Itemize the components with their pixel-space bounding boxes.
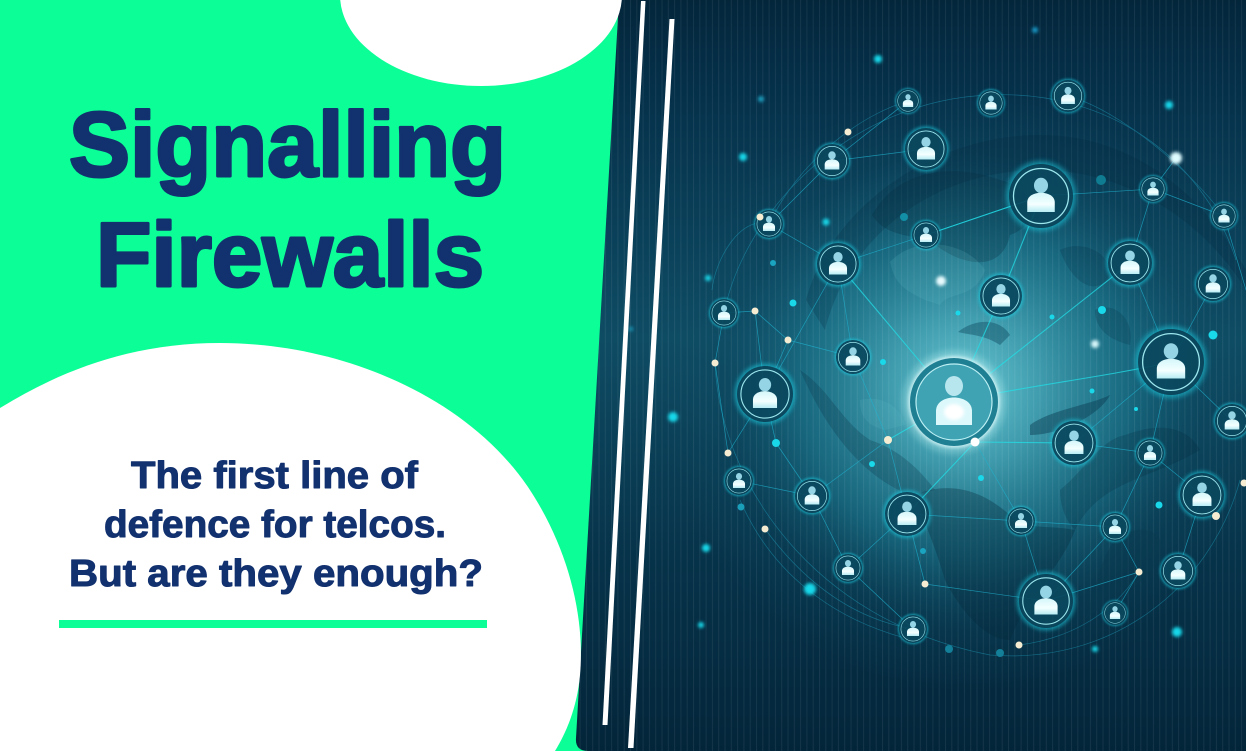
green underline	[59, 620, 487, 628]
subtitle: defence for telcos.	[104, 504, 446, 546]
title	[69, 94, 506, 306]
large white blob	[0, 343, 581, 751]
central user node	[908, 356, 1000, 448]
subtitle: The first line of	[131, 455, 418, 497]
vertical stripe texture	[576, 0, 1246, 751]
subtitle: But are they enough?	[69, 553, 483, 595]
bright connections	[838, 196, 1171, 514]
title: Firewalls	[96, 205, 484, 306]
user nodes	[709, 79, 1246, 644]
white diagonal line left	[602, 1, 646, 725]
central glow	[902, 350, 1006, 454]
world map on globe	[800, 135, 1246, 640]
title: Signalling	[69, 94, 506, 196]
subtitle	[69, 455, 483, 595]
globe outline arcs	[712, 95, 1240, 656]
white diagonal line right	[628, 19, 674, 748]
top white blob	[340, 0, 622, 86]
cyan light dots	[629, 27, 1218, 657]
network connections	[715, 101, 1246, 629]
panel: dark network image	[576, 0, 1246, 751]
white and cream dots	[712, 128, 1246, 648]
